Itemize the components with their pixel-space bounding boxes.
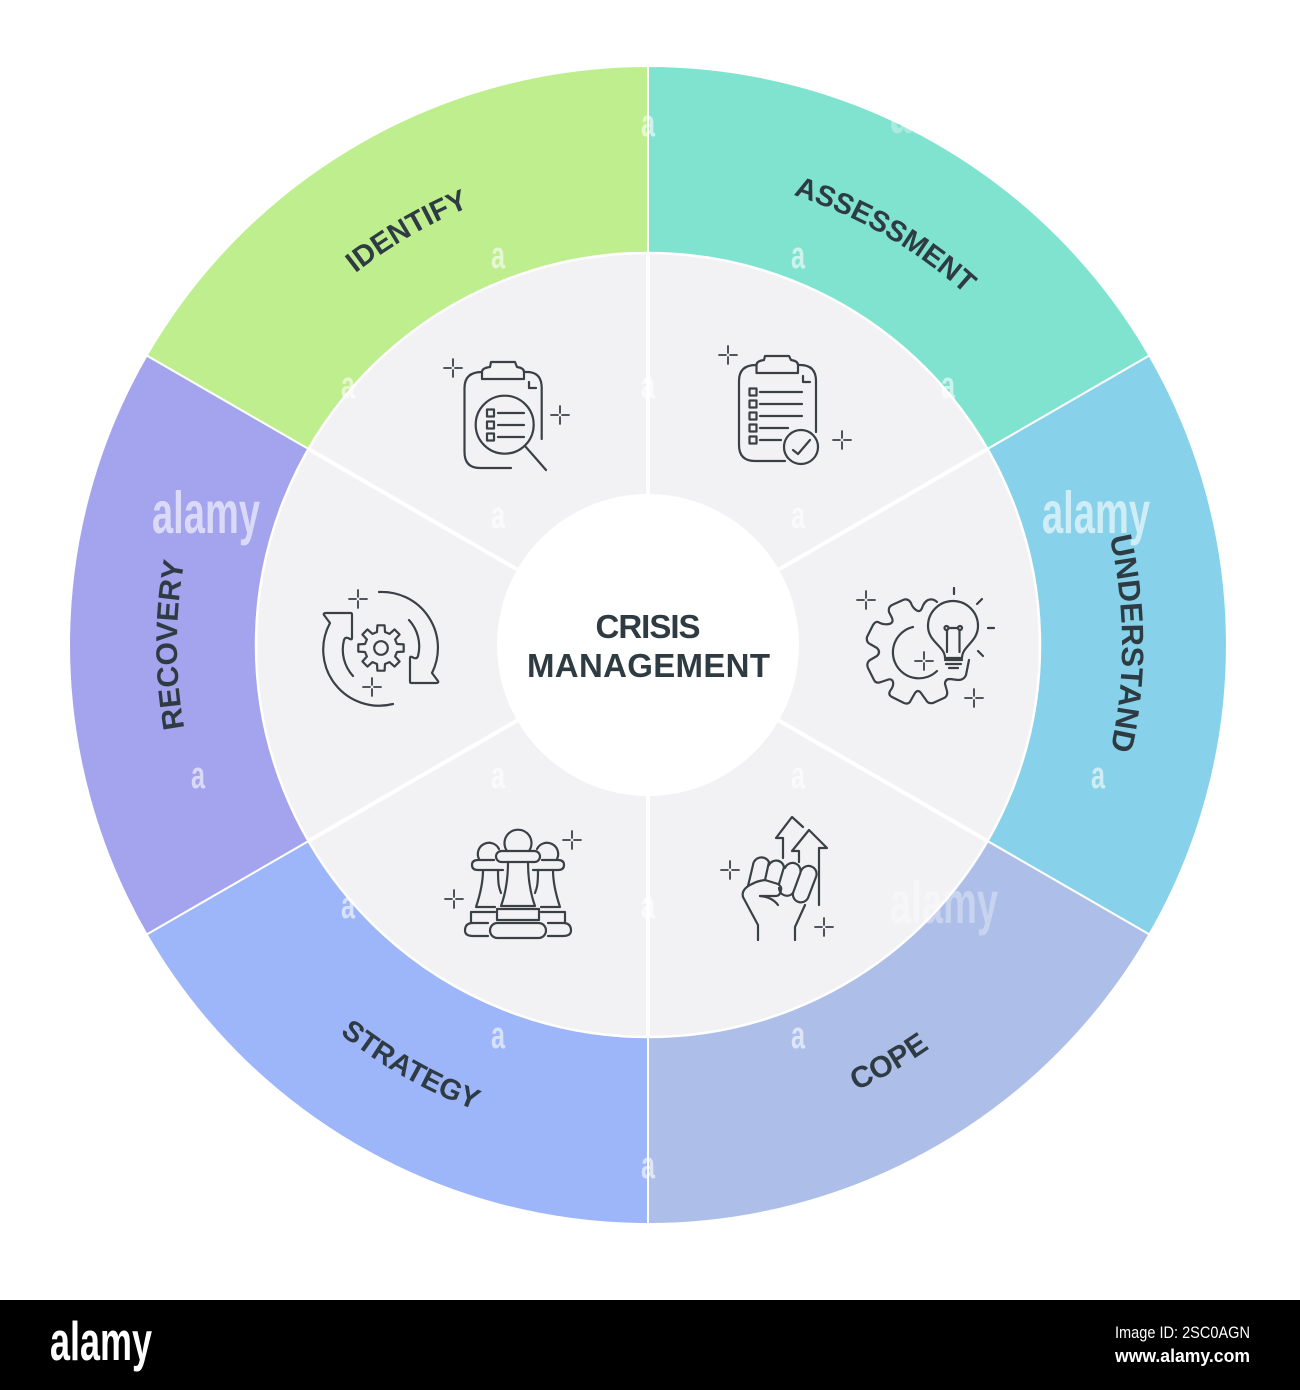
watermark pattern: a xyxy=(641,885,656,927)
watermark pattern xyxy=(152,80,1150,1187)
footer logo: alamy xyxy=(50,1310,152,1372)
watermark pattern: a xyxy=(791,755,806,797)
footer website: www.alamy.com xyxy=(1114,1346,1250,1366)
center circle xyxy=(497,494,799,796)
segment: understand xyxy=(648,356,1227,934)
label: assessment: ASSESSMENT xyxy=(794,178,978,290)
icon: raised fist with arrows xyxy=(721,817,833,940)
icon: chess pieces xyxy=(445,830,581,938)
segment: strategy xyxy=(147,645,648,1224)
inner disc panel xyxy=(256,253,1040,1037)
watermark pattern: a xyxy=(641,365,656,407)
watermark pattern: a xyxy=(641,103,656,145)
watermark pattern: a xyxy=(491,755,506,797)
watermark pattern: a xyxy=(491,495,506,537)
watermark pattern: a xyxy=(491,1015,506,1057)
watermark pattern: a xyxy=(341,365,356,407)
segment: cope xyxy=(648,645,1149,1224)
footer image id: Image ID: 2SC0AGN xyxy=(1115,1323,1250,1342)
icon: gear with cycle arrows xyxy=(323,590,438,706)
outer ring segments xyxy=(69,66,1227,1224)
center title xyxy=(527,608,770,684)
watermark pattern: a xyxy=(941,365,956,407)
watermark pattern: a xyxy=(491,235,506,277)
watermark pattern: a xyxy=(341,885,356,927)
watermark pattern: alamy xyxy=(152,480,260,546)
segment: identify xyxy=(147,66,648,645)
segment: assessment xyxy=(648,66,1149,645)
center title: MANAGEMENT xyxy=(527,647,770,684)
watermark pattern: a xyxy=(791,495,806,537)
label: strategy: STRATEGY xyxy=(342,1021,482,1108)
label: recovery: RECOVERY xyxy=(156,559,184,730)
label: understand: UNDERSTAND xyxy=(1111,534,1144,752)
watermark pattern: alamy xyxy=(890,870,998,936)
watermark pattern: a xyxy=(641,1145,656,1187)
watermark pattern: a xyxy=(791,235,806,277)
watermark pattern: a xyxy=(1091,755,1106,797)
icon: clipboard with magnifier xyxy=(444,359,569,470)
watermark pattern: a xyxy=(191,755,206,797)
footer bar xyxy=(0,1300,1300,1390)
segment: recovery xyxy=(69,356,648,934)
icon: checklist clipboard xyxy=(719,346,851,464)
icon: gear with lightbulb xyxy=(857,588,994,707)
center title: CRISIS xyxy=(596,608,700,645)
watermark pattern: alamy xyxy=(890,80,998,146)
watermark pattern: alamy xyxy=(1042,480,1150,546)
label: cope: COPE xyxy=(851,1032,929,1088)
label: identify: IDENTIFY xyxy=(344,188,462,272)
watermark pattern: a xyxy=(791,1015,806,1057)
